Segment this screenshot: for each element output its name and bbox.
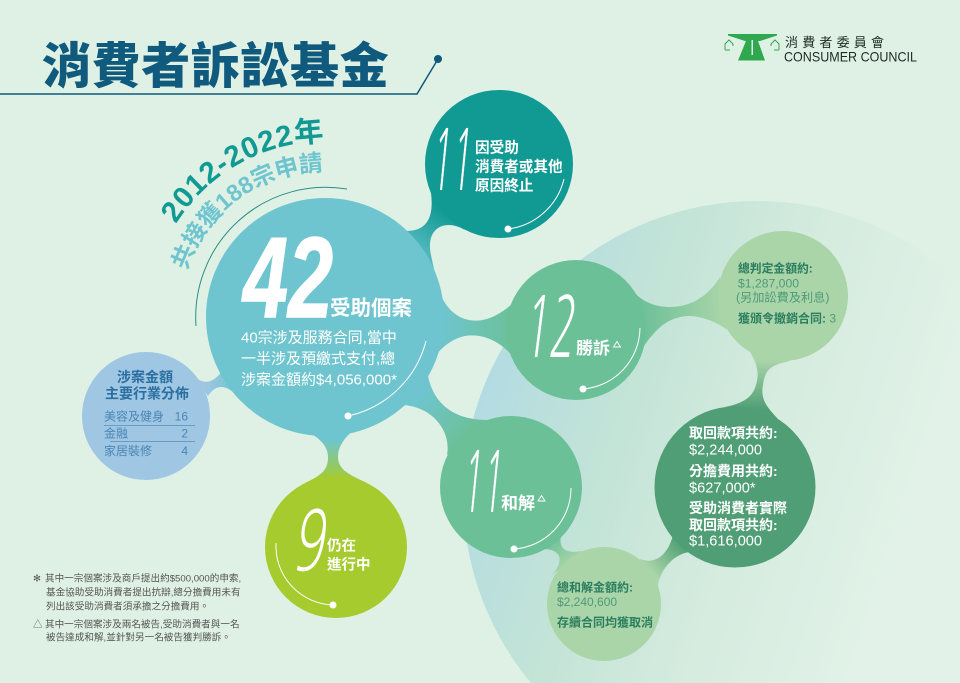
amount: $1,287,000 [738,276,799,290]
label: terminated: 因受助 [475,138,519,156]
contracts cancelled: 存續合同均獲取消 [557,614,653,630]
connector: main to 12 [400,295,513,376]
row: finance: 2 [181,426,188,440]
row: finance: 金融 [104,426,128,440]
panel: 11 settled: 11 [461,441,501,525]
arc and dot [276,543,336,608]
background large circle [463,201,960,683]
recovered amount: 取回款項共約: [689,425,778,441]
label: ongoing: 仍在 [327,538,356,554]
label: won: 勝訴 [576,339,610,358]
connector: main to 11 [380,376,488,455]
connector: main to 9 [300,400,385,483]
label: ongoing: 進行中 [327,556,370,574]
heading: 涉案金額 [117,369,173,385]
triangle mark [614,342,620,347]
logo text: 消費者委員會 [785,35,888,50]
arc and dot [504,179,564,232]
footnote: triangle: 被告達成和解,並針對另一名被告獲判勝訴。 [46,632,231,644]
footnote: asterisk: 其中一宗個案涉及商戶提出約$500,000的申索, [45,572,241,584]
number 9: 9 [292,500,330,584]
connector: main to teal [400,193,465,300]
panel: settlement amounts [547,547,661,661]
row: beauty and fitness: 16 [175,410,188,424]
panel: 12 won [506,260,646,400]
connector: 12 to judgment [636,277,727,346]
row: beauty and fitness [104,408,188,424]
footnote: triangle: 其中一宗個案涉及兩名被告,受助消費者與一名 [45,618,240,630]
description text: 涉案金額約$4,056,000* [241,372,397,388]
arc and dot [344,341,426,420]
connector: judgment to recovered amounts [725,352,790,419]
amount: (另加訟費及利息) [736,290,829,304]
panel: 42 assisted cases [206,198,444,436]
icon: scales [725,34,779,60]
actual recovered: 受助消費者實際 [689,500,787,516]
description text: 一半涉及預繳式支付,總 [241,350,395,368]
footnote: asterisk: 列出該受助消費者須承擔之分擔費用。 [46,600,209,612]
logo: Consumer Council [725,34,917,64]
shared costs: 分擔費用共約: [689,463,778,479]
panel: 11 terminated: 11 [430,119,470,203]
curved heading: 2012-2022: 2012-2022年 [162,118,323,224]
actual recovered: $1,616,000 [689,534,762,550]
triangle mark [538,496,545,501]
number 42: 42 [242,215,333,342]
footnotes [33,572,244,644]
number 12: 12 [522,286,576,370]
amount: $2,240,600 [557,595,617,609]
recovered amount: $2,244,000 [689,442,762,458]
title: 消費者訴訟基金 [42,40,389,94]
footnote: asterisk: 基金協助受助消費者提出抗辯,總分擔費用未有 [46,586,241,598]
label: assisted cases: 受助個案 [330,297,412,320]
shared costs: $627,000* [689,480,756,496]
description text: 40宗涉及服務合同,當中 [241,330,397,346]
connector: 11 to settlement [545,536,582,575]
logo: Consumer Council: CONSUMER COUNCIL [784,50,917,64]
row: beauty and fitness: 美容及健身 [104,408,164,424]
arc around main circle [196,187,347,326]
row: home renovation: 家居裝修 [104,443,152,458]
label: terminated: 消費者或其他 [475,158,563,176]
panel: main industries [82,352,210,480]
row: finance [104,426,188,440]
title underline with dot [0,55,442,94]
actual recovered: 取回款項共約: [689,517,778,533]
panel: recovered amounts [654,406,816,568]
heading: 主要行業分佈 [105,386,189,402]
row: home renovation: 4 [181,444,188,458]
panel: 11 settled [440,416,582,558]
panel: 9 ongoing [265,476,407,618]
panel: 11 terminated [425,90,573,238]
heading: total judgment: 總判定金額約: [738,262,813,276]
contracts cancelled: 獲頒令撤銷合同: 3 [738,310,836,326]
connector: recovered amounts to settlement [640,535,690,590]
heading: total settlement: 總和解金額約: [557,580,633,594]
panel: judgment amounts [718,231,848,361]
arc and dot [580,328,640,392]
label: settled: 和解 [501,494,535,513]
label: terminated: 原因終止 [475,176,533,194]
arc and dot [510,488,571,552]
curved heading: 188 applications: 共接獲188宗申請 [170,151,322,270]
footnote: triangle: △ [33,620,43,630]
connector: blue to main [190,368,240,400]
row: home renovation [104,443,188,458]
footnote: asterisk: ✻ [33,574,41,584]
